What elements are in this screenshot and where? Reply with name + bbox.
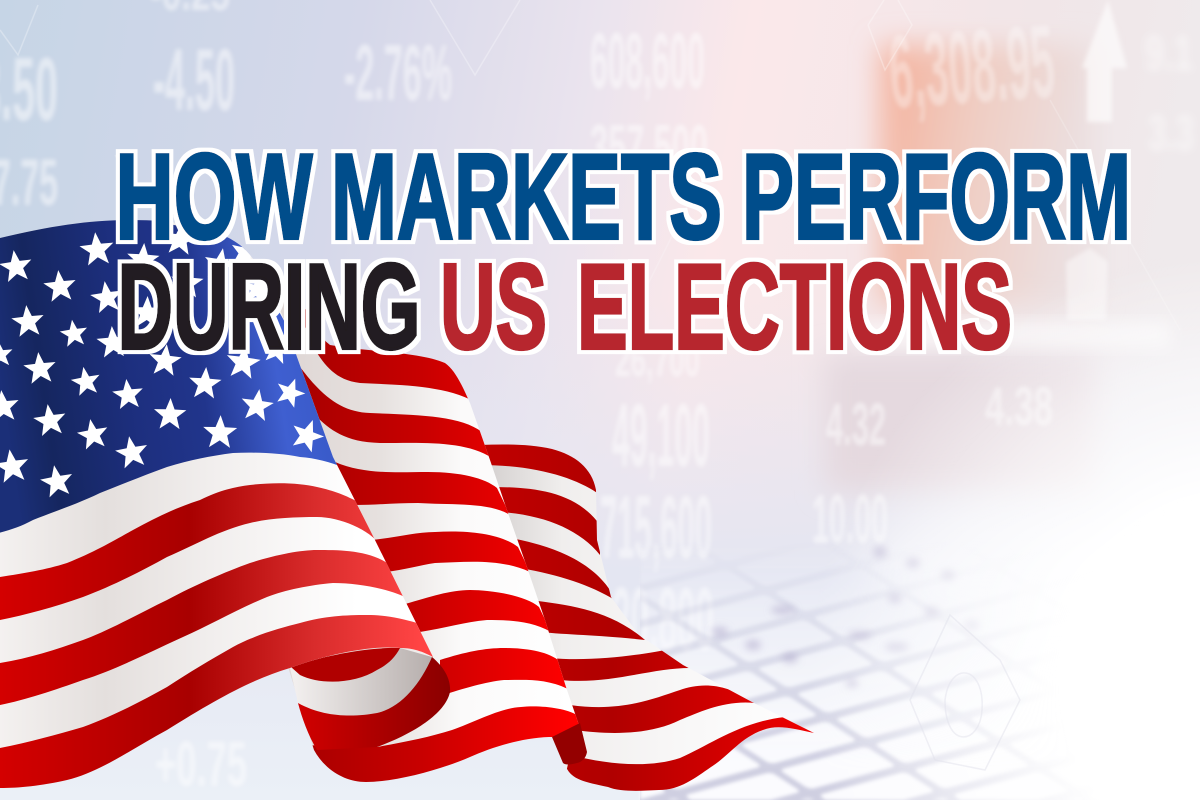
title line 1: blue: HOW	[116, 128, 313, 264]
watermark: keyboard outline	[910, 615, 1020, 770]
glow: lower data panel	[825, 355, 1095, 490]
blurred market figures: 4.38	[985, 375, 1053, 437]
title line 2: black word: DURING	[118, 238, 420, 374]
title line 2: red words: US	[440, 238, 547, 374]
flag: rolled fold at far end	[552, 723, 587, 764]
flag: front stripe section	[0, 215, 445, 795]
flag: blue star canton	[0, 215, 345, 534]
blurred market figures: 4.32	[826, 391, 886, 458]
title line 2: red words	[440, 238, 1012, 374]
blurred market figures: 357,500	[590, 113, 708, 182]
watermark: faint outlines	[0, 0, 1180, 330]
title	[116, 128, 1131, 374]
keyboard: white haze	[870, 510, 1110, 610]
keyboard: blurred key shadows	[712, 546, 980, 687]
stars: canton star field	[0, 221, 328, 498]
arrow: upper market arrow	[1082, 0, 1127, 122]
blurred market figures: 26,700	[615, 334, 700, 386]
title line 1: blue: MARKETS	[331, 128, 722, 264]
blurred market figures: 10.00	[812, 480, 888, 558]
blurred market figures: 715,600	[600, 478, 712, 578]
arrow: lower market arrow	[1066, 248, 1108, 320]
blurred market figures: +0.75	[155, 728, 247, 800]
keyboard	[640, 596, 1004, 800]
blurred market figures: -2.76%	[344, 28, 452, 117]
flag: middle stripe section	[280, 302, 578, 782]
flag: curled underside red band	[298, 657, 450, 750]
blurred market figures: 49,100	[612, 386, 710, 486]
flag: curled underside white	[290, 648, 434, 716]
flag: waving American flag	[0, 215, 830, 800]
glow: orange data panel	[880, 45, 1095, 305]
blurred figures: far right column	[1145, 25, 1194, 161]
blurred market figures: 20,800	[612, 570, 714, 670]
blurred market figures: -4.50	[153, 30, 235, 129]
title line 1: blue	[116, 128, 1131, 264]
flag: far stripe section	[484, 444, 814, 791]
flag: curled underside dark crescent	[291, 648, 400, 682]
glow: light bar below panel	[860, 322, 1170, 348]
blurred market figures: 608,600	[590, 16, 705, 105]
fade: white lower right	[780, 240, 1200, 800]
